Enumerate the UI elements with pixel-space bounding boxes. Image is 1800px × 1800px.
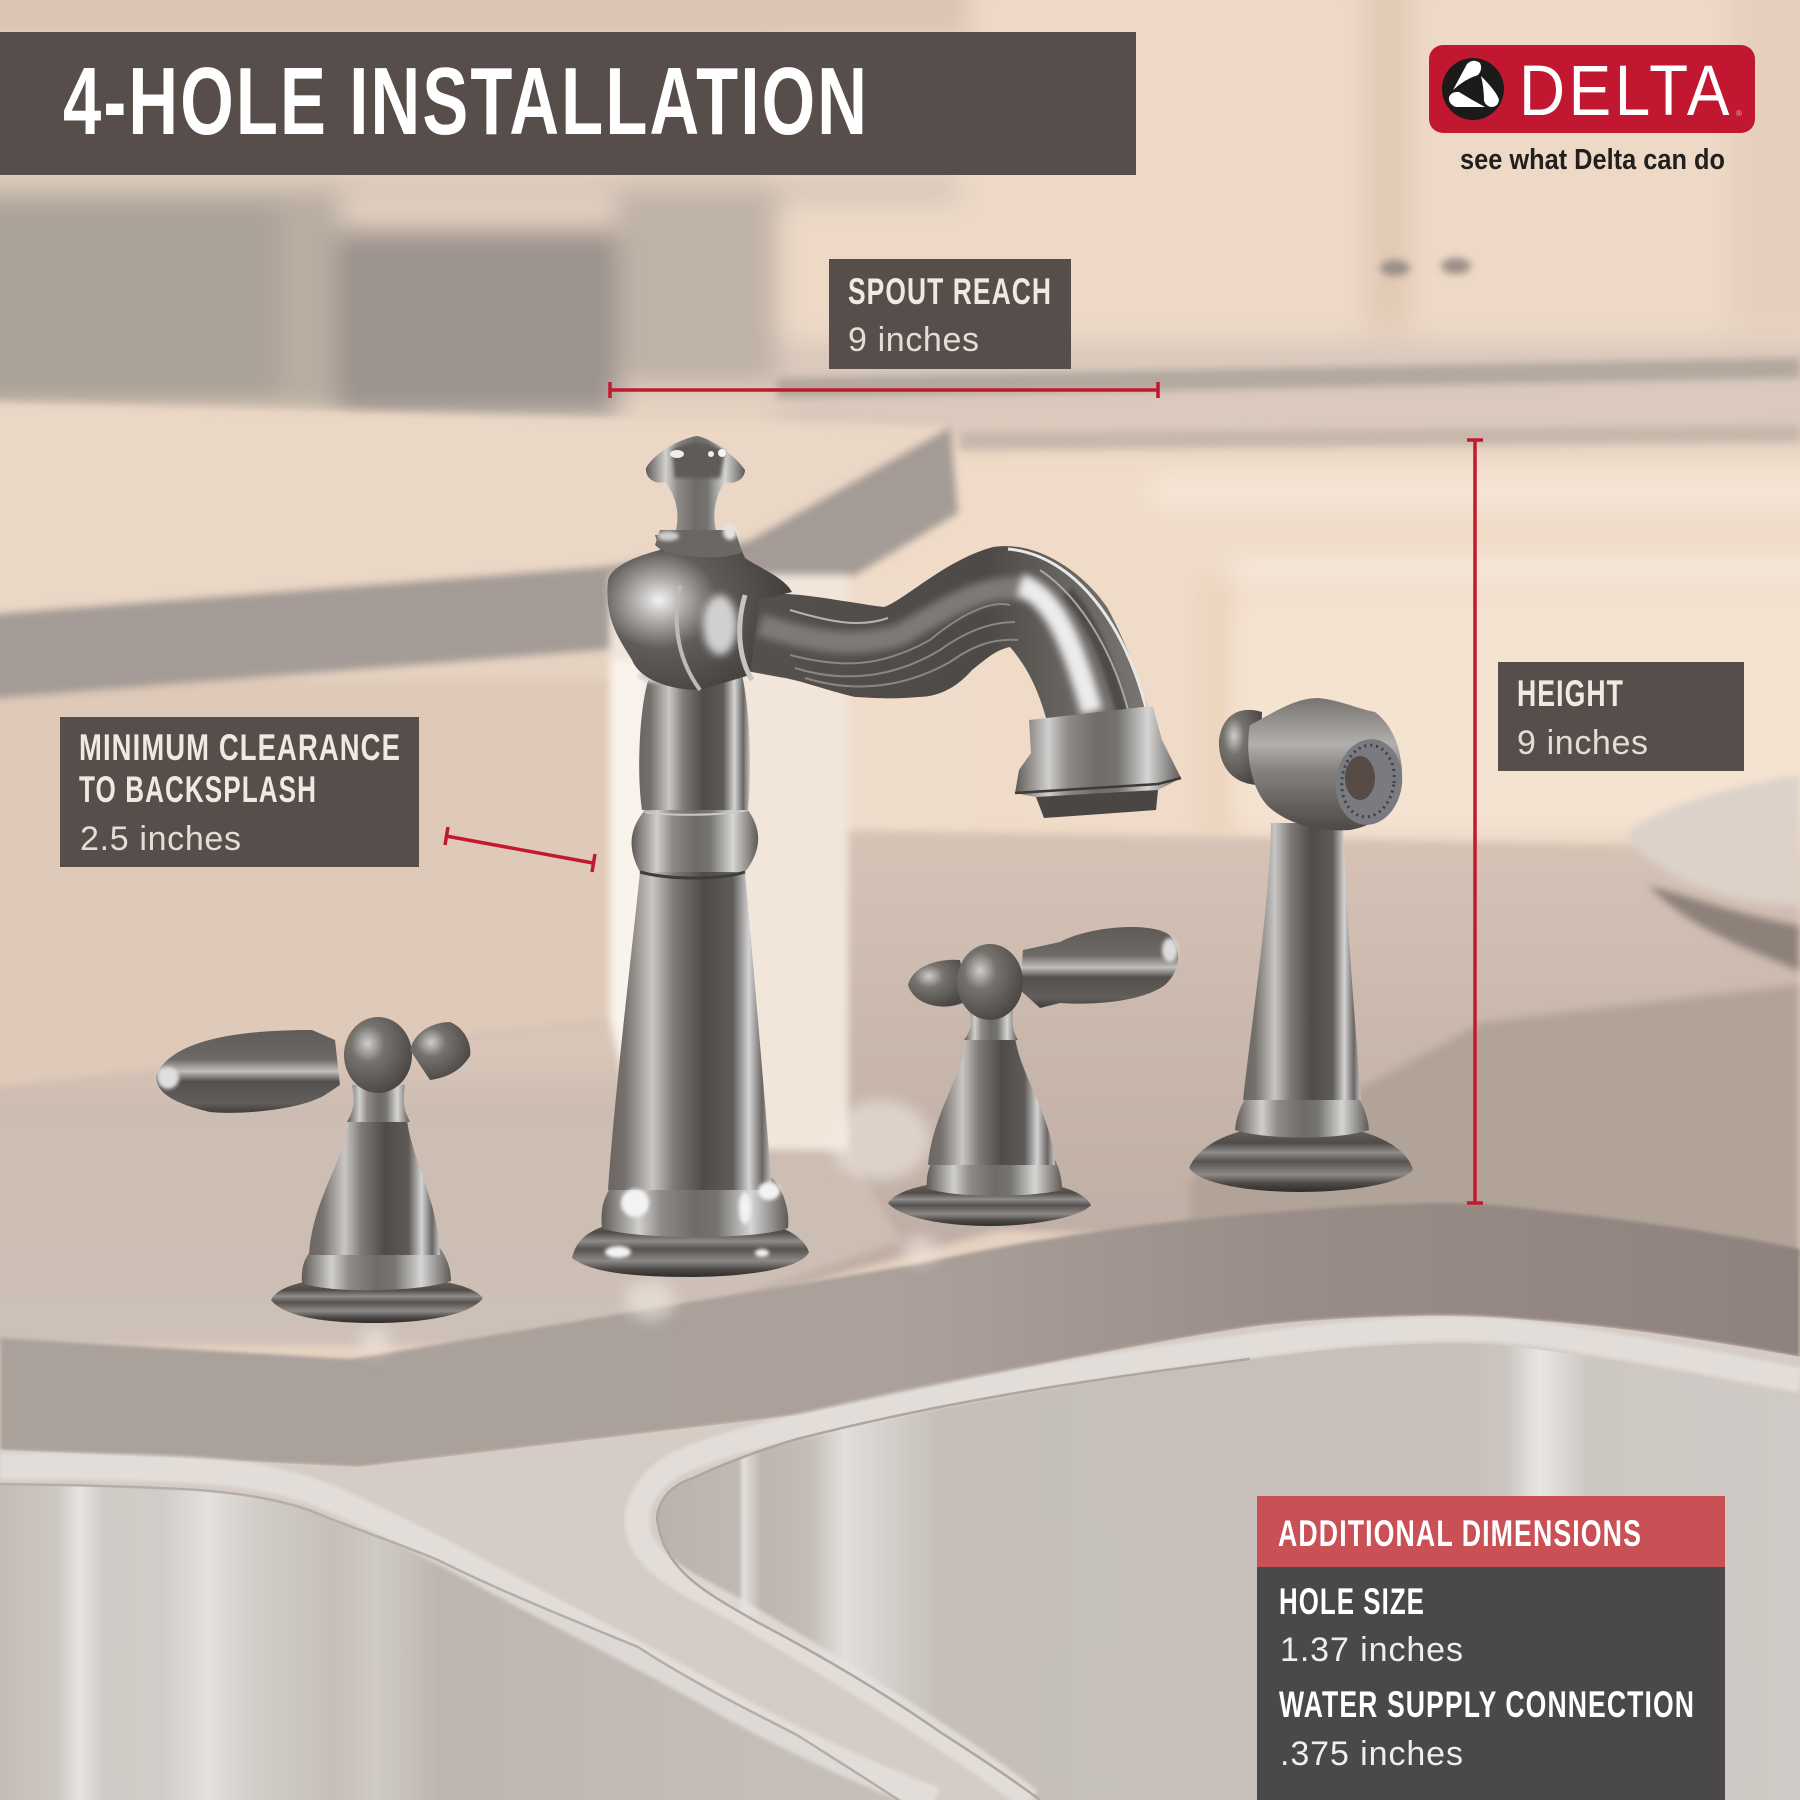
handle knob [344,1017,412,1093]
panel body [1257,1567,1725,1800]
handle bell [309,1120,440,1255]
callout: spout reach: 9 inches [848,321,979,359]
tagline: see what Delta can do [1460,144,1725,176]
hole size [1279,1581,1463,1669]
handle knob [957,944,1023,1020]
finial [646,436,745,530]
handle ring [302,1248,451,1290]
spout nozzle [1015,707,1181,818]
countertop front edge [0,1203,1800,1467]
dimension line: spout reach [610,382,1158,398]
callout: minimum clearance: TO BACKSPLASH [79,769,317,810]
faucet base highlights [605,1182,780,1258]
callout: height: HEIGHT [1517,673,1624,714]
right sink rim [637,1328,1800,1800]
callout: minimum clearance: 2.5 inches [80,820,241,858]
sprayer ring [1235,1096,1369,1138]
panel heading: ADDITIONAL DIMENSIONS [1278,1513,1642,1554]
callout: height [1498,662,1744,771]
handle neck [347,1085,410,1122]
dimension line: clearance [445,827,595,872]
callout: minimum clearance [60,717,419,867]
right sink basin [657,1343,1800,1800]
left sink basin [0,1483,900,1800]
sprayer face [1330,735,1408,829]
hole size: 1.37 inches [1280,1631,1463,1669]
faucet cone [608,872,772,1190]
sprayer stem [1243,823,1361,1100]
sprayer head [1248,698,1402,830]
left sink rim [0,1466,935,1800]
logo wordmark: DELTA [1519,52,1733,131]
icon: Delta triangle mark [1442,58,1504,120]
handle lever [156,1030,340,1113]
panel: additional dimensions [1257,1496,1725,1800]
handle neck [964,1010,1018,1040]
callout: height: 9 inches [1517,724,1648,762]
handle lever [1020,927,1178,1008]
handle bell [928,1037,1055,1165]
faucet: main spout and column [572,436,1181,1277]
faucet body [607,535,792,690]
lower wall and peninsula [0,680,620,1120]
spout shading [760,549,1146,712]
reflections under faucet bases [359,1100,938,1354]
sink deck [0,1316,1800,1800]
handle base [888,1180,1091,1226]
callout: spout reach: SPOUT REACH [848,271,1052,312]
faucet collar [655,530,742,557]
faucet upper column [639,675,750,810]
water supply connection [1279,1684,1695,1773]
Delta logo [1429,45,1755,176]
handle ring [927,1160,1062,1196]
faucet hub ring [602,1178,788,1237]
faucet base [572,1215,809,1277]
faucet ring [632,810,758,872]
right handle [888,927,1178,1226]
handle short lever [908,960,968,1007]
water supply connection: .375 inches [1280,1735,1463,1773]
left handle [156,1017,483,1323]
title: 4-HOLE INSTALLATION [63,48,869,155]
handle short lever [410,1022,470,1080]
logo registered mark: ® [1736,109,1742,118]
callout: spout reach [829,259,1071,369]
title bar [0,32,1136,175]
handle base [271,1277,483,1323]
dimension line: height [1467,440,1483,1203]
spout arm [741,546,1150,725]
side sprayer [1189,698,1413,1192]
hole size: HOLE SIZE [1279,1581,1425,1622]
callout: minimum clearance: MINIMUM CLEARANCE [79,727,401,768]
panel header [1257,1496,1725,1567]
countertop surfaces [0,830,1800,1340]
sprayer head left bulb [1219,710,1262,785]
dish [1625,775,1800,905]
sprayer base [1189,1124,1413,1192]
